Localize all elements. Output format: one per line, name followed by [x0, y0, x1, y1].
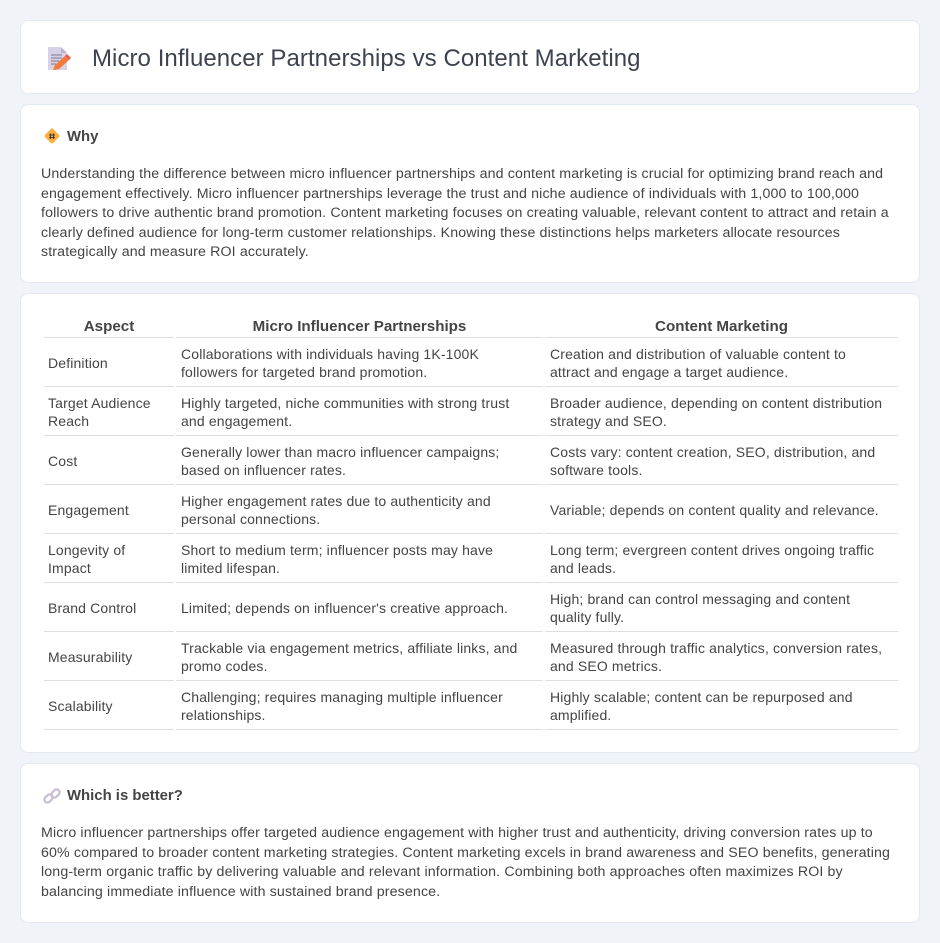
row: cost: based on influencer rates.: [181, 462, 346, 478]
row: measurability: Trackable via engagement metrics, affiliate links, and: [181, 640, 518, 656]
text block: which is better: [41, 825, 890, 900]
row: measurability: Measured through traffic analytics, conversion rates,: [550, 640, 882, 656]
row: cost: Costs vary: content creation, SEO, distribution, and: [550, 444, 875, 460]
title: Micro Influencer Partnerships vs Content Marketing: [92, 45, 641, 72]
row: scalability: amplified.: [550, 707, 611, 723]
row: definition: [44, 346, 898, 387]
row: cost: software tools.: [550, 462, 643, 478]
row: scalability: relationships.: [181, 707, 266, 723]
row: definition: Creation and distribution of valuable content to: [550, 346, 846, 362]
text block: which is better: long-term organic traffic by delivering valuable and relevant information. Combining both approaches often maximizes ROI by: [41, 864, 843, 880]
header: micro influencer partnerships: [176, 318, 543, 338]
text block: why: Understanding the difference between micro influencer partnerships and content marketing is crucial for optimizing brand reach and: [41, 166, 883, 182]
row: target audience reach: Broader audience, depending on content distribution: [550, 395, 882, 411]
row: engagement: Variable; depends on content quality and relevance.: [550, 502, 879, 518]
row: longevity of impact: limited lifespan.: [181, 560, 280, 576]
row: scalability: Highly scalable; content can be repurposed and: [550, 689, 853, 705]
row: target audience reach: and engagement.: [181, 413, 292, 429]
row: scalability: Scalability: [48, 698, 113, 714]
comparison table header: [44, 318, 898, 338]
row: longevity of impact: Longevity of: [48, 542, 125, 558]
row: engagement: Engagement: [48, 502, 129, 518]
header: aspect: Aspect: [84, 318, 134, 335]
row: measurability: Measurability: [48, 649, 132, 665]
text block: which is better: 60% compared to broader content marketing strategies. Content marketing excels in brand awareness and SEO benefits, generating: [41, 845, 890, 861]
heading: why: Why: [67, 129, 98, 145]
text block: why: strategically and measure ROI accurately.: [41, 244, 309, 260]
row: scalability: Challenging; requires managing multiple influencer: [181, 689, 503, 705]
row: longevity of impact: [44, 542, 898, 583]
row: engagement: [44, 493, 898, 534]
text block: why: [41, 166, 889, 260]
row: longevity of impact: Short to medium term; influencer posts may have: [181, 542, 493, 558]
header: aspect: [44, 318, 174, 338]
row: brand control: High; brand can control messaging and content: [550, 591, 850, 607]
panel: which is better: [20, 763, 920, 923]
row: target audience reach: Highly targeted, niche communities with strong trust: [181, 395, 509, 411]
text block: which is better: Micro influencer partnerships offer targeted audience engagement with higher trust and authenticity, driving conversion rates up to: [41, 825, 873, 841]
row: engagement: Higher engagement rates due to authenticity and: [181, 493, 491, 509]
row: target audience reach: strategy and SEO.: [550, 413, 667, 429]
row: definition: Definition: [48, 355, 108, 371]
icon: warning diamond: [44, 128, 60, 144]
row: cost: Cost: [48, 453, 77, 469]
text block: why: engagement effectively. Micro influencer partnerships leverage the trust and niche audience of individuals with 1,000 to 100,000: [41, 186, 859, 202]
row: brand control: quality fully.: [550, 609, 624, 625]
header: micro influencer partnerships: Micro Influencer Partnerships: [253, 318, 466, 335]
row: brand control: [44, 591, 898, 632]
row: target audience reach: Reach: [48, 413, 89, 429]
heading: which is better: Which is better?: [67, 788, 183, 804]
row: measurability: promo codes.: [181, 658, 268, 674]
row: longevity of impact: and leads.: [550, 560, 616, 576]
row: measurability: and SEO metrics.: [550, 658, 662, 674]
row: brand control: Brand Control: [48, 600, 136, 616]
panel: why: [20, 104, 920, 283]
row: longevity of impact: Long term; evergreen content drives ongoing traffic: [550, 542, 874, 558]
row: definition: followers for targeted brand promotion.: [181, 364, 427, 380]
row: brand control: Limited; depends on influencer's creative approach.: [181, 600, 508, 616]
row: cost: [44, 444, 898, 485]
row: scalability: [44, 689, 898, 730]
text block: why: clearly defined audience for long-term customer relationships. Knowing these distinctions helps marketers allocate resources: [41, 225, 840, 241]
icon: document with pencil: [48, 47, 71, 70]
header: content marketing: Content Marketing: [655, 318, 788, 335]
row: target audience reach: [44, 395, 898, 436]
row: target audience reach: Target Audience: [48, 395, 151, 411]
text block: why: followers to drive authentic brand promotion. Content marketing focuses on creating valuable, relevant content to attract and retain a: [41, 205, 889, 221]
icon: chain link: [43, 788, 61, 804]
row: definition: Collaborations with individuals having 1K-100K: [181, 346, 479, 362]
row: definition: attract and engage a target audience.: [550, 364, 788, 380]
row: engagement: personal connections.: [181, 511, 320, 527]
panel: comparison table: [20, 293, 920, 753]
panel: title card: [20, 20, 920, 94]
header: content marketing: [545, 318, 898, 338]
row: longevity of impact: Impact: [48, 560, 91, 576]
row: measurability: [44, 640, 898, 681]
row: cost: Generally lower than macro influencer campaigns;: [181, 444, 499, 460]
text block: which is better: balancing immediate influence with sustained brand presence.: [41, 884, 440, 900]
